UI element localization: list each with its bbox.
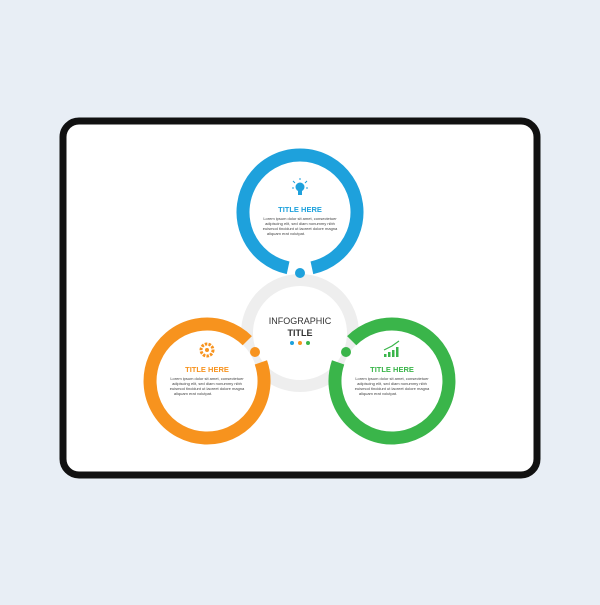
panel: orange: Lorem ipsum dolor sit amet, consectetuer	[170, 376, 244, 381]
panel: green: TITLE HERE	[370, 365, 414, 374]
panel: green: euismod tincidunt ut laoreet dolore magna	[355, 386, 430, 391]
icon: bulb	[292, 178, 308, 195]
dots	[290, 341, 310, 345]
panel: green: adipiscing elit, sed diam nonummy nibh	[357, 381, 427, 386]
panel: orange: euismod tincidunt ut laoreet dolore magna	[170, 386, 245, 391]
panel: green: Lorem ipsum dolor sit amet, consectetuer	[355, 376, 429, 381]
icon: gear	[201, 344, 213, 356]
tablet frame	[63, 121, 537, 475]
panel: blue: TITLE HERE	[278, 205, 322, 214]
panel: orange: TITLE HERE	[185, 365, 229, 374]
panel: blue: euismod tincidunt ut laoreet dolore magna	[263, 226, 338, 231]
panel: orange	[150, 324, 264, 438]
panel: green: aliquam erat volutpat.	[359, 391, 397, 396]
center title: INFOGRAPHIC	[269, 316, 332, 326]
center ring	[247, 280, 353, 386]
panel: green	[335, 324, 449, 438]
panel: blue: aliquam erat volutpat.	[267, 231, 305, 236]
center ring: TITLE	[288, 328, 312, 338]
panel: blue	[243, 155, 357, 278]
panel: orange: adipiscing elit, sed diam nonummy nibh	[172, 381, 242, 386]
icon: chart	[384, 341, 399, 357]
panel: orange: aliquam erat volutpat.	[174, 391, 212, 396]
panel: blue: adipiscing elit, sed diam nonummy nibh	[265, 221, 335, 226]
panel: blue: Lorem ipsum dolor sit amet, consectetuer	[263, 216, 337, 221]
